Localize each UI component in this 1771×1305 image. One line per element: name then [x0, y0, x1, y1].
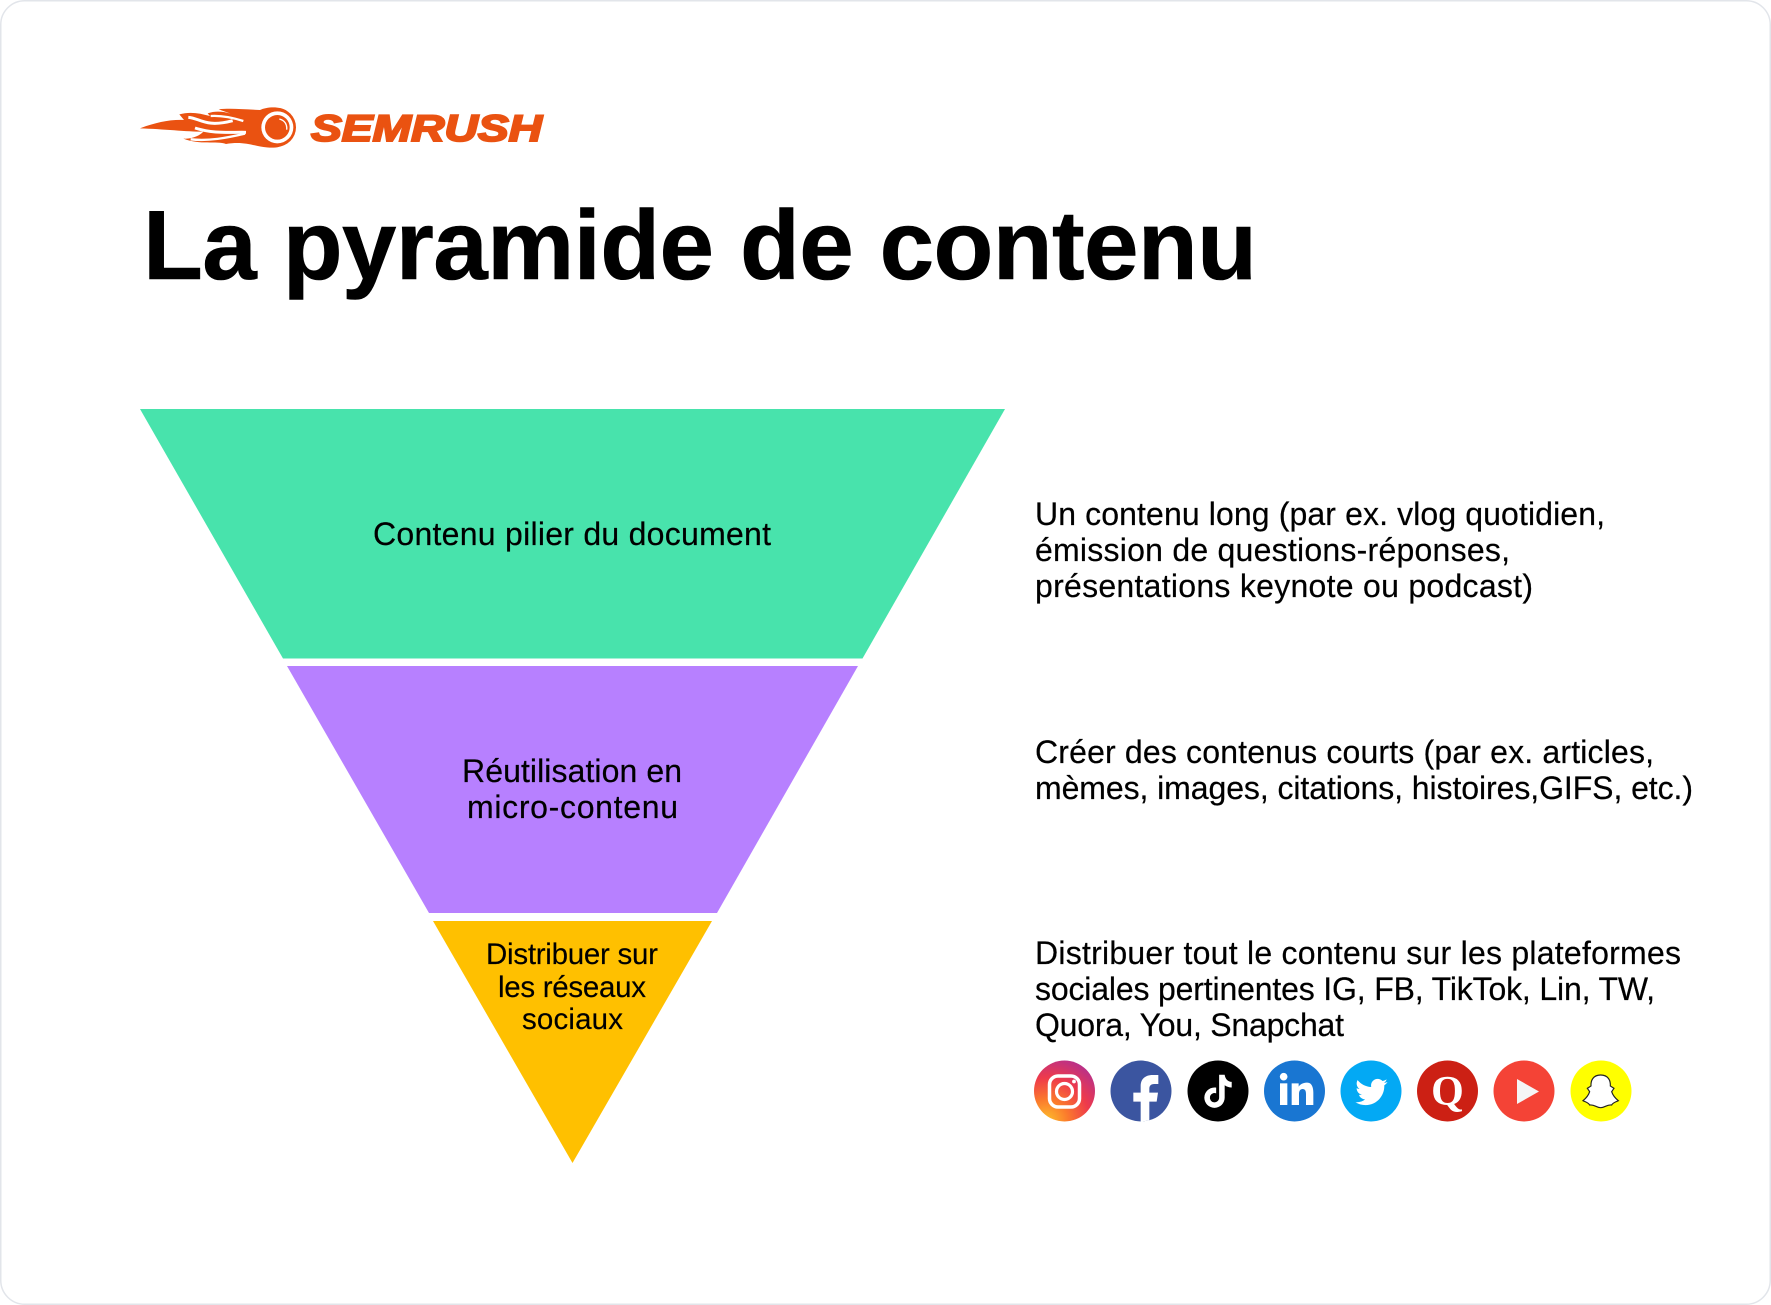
tier 2: repurposing: Réutilisation en [462, 753, 682, 789]
tier 3: distribution: Distribuer sur [486, 938, 658, 971]
description: micro content [1035, 734, 1693, 806]
icon: Snapchat [1570, 1060, 1632, 1122]
tier 3: distribution: les réseaux [498, 971, 646, 1004]
description: micro content: Créer des contenus courts (par ex. articles, [1035, 734, 1654, 770]
description: distribution: sociales pertinentes IG, FB, TikTok, Lin, TW, [1035, 971, 1655, 1007]
tier 3: distribution [433, 921, 712, 1163]
logo wordmark: SEMRUSH [311, 108, 544, 149]
icon: Quora [1417, 1060, 1478, 1122]
icon: TikTok [1188, 1060, 1248, 1122]
logo: Semrush [140, 107, 544, 149]
icon: Quora: Q [1431, 1069, 1464, 1115]
icon: video play [1494, 1060, 1554, 1122]
tier 3: distribution: sociaux [522, 1003, 623, 1036]
inverted pyramid [140, 409, 1005, 1163]
icon: Twitter [1340, 1060, 1402, 1122]
tier 2: repurposing [287, 666, 858, 913]
icon: LinkedIn [1264, 1060, 1325, 1122]
description: pillar content [1035, 496, 1605, 604]
title: La pyramide de contenu [143, 190, 1257, 300]
description: distribution: Quora, You, Snapchat [1035, 1007, 1344, 1043]
tier 2: repurposing: micro-contenu [467, 789, 678, 825]
tier 1: pillar content [140, 409, 1005, 658]
description: distribution [1035, 935, 1681, 1043]
description: distribution: Distribuer tout le contenu sur les plateformes [1035, 935, 1681, 971]
description: pillar content: Un contenu long (par ex. vlog quotidien, [1035, 496, 1605, 532]
icon: flaming comet [140, 107, 296, 148]
social media icons [1034, 1060, 1632, 1123]
description: micro content: mèmes, images, citations, histoires,GIFS, etc.) [1035, 770, 1693, 806]
description: pillar content: émission de questions-réponses, [1035, 532, 1510, 568]
icon: Facebook [1110, 1060, 1172, 1123]
tier 1: pillar content: Contenu pilier du document [373, 516, 771, 552]
icon: Instagram [1034, 1060, 1095, 1122]
description: pillar content: présentations keynote ou podcast) [1035, 568, 1533, 604]
